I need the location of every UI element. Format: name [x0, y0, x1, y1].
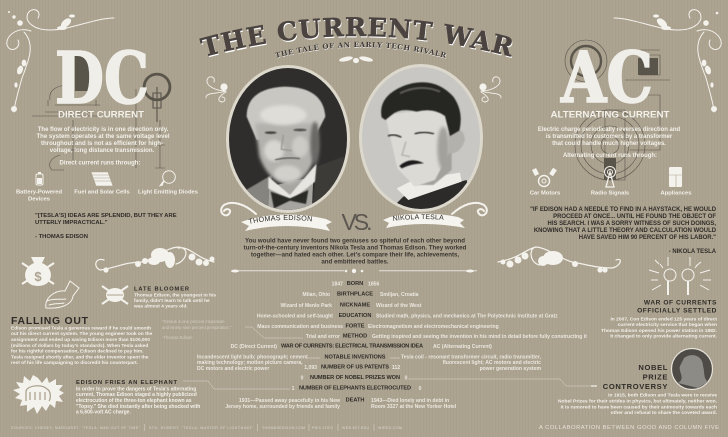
- row: birthplace: BIRTHPLACE: [337, 292, 373, 298]
- labels: direct current uses: Light Emitting Diodes: [138, 190, 198, 196]
- ornament: right oval swirl: [479, 77, 501, 102]
- row: born: BORN: [347, 281, 363, 287]
- text: nobel prize: [558, 392, 718, 416]
- icon: light emitting diode: [161, 171, 175, 185]
- footer: sources: PBS.ORG: [312, 426, 334, 430]
- row: notable inventions: fluorescent light; AC motors and electric: [443, 360, 541, 366]
- ornament: left leaf flourish: [96, 247, 214, 273]
- big letters DC: DC: [55, 36, 149, 120]
- row: patents: 112: [392, 365, 400, 371]
- heading: falling out: FALLING OUT: [11, 316, 89, 327]
- quote: Tesla: - NIKOLA TESLA: [669, 249, 717, 255]
- quote: genius: [162, 319, 232, 340]
- icon: nobel medal: [672, 348, 712, 390]
- quote: Tesla: HAVE SAVED HIM 90 PERCENT OF HIS LABOR.": [579, 235, 716, 241]
- labels: direct current uses: [16, 190, 198, 202]
- icon: tied string: [102, 286, 128, 304]
- row: notable inventions: making technology; motion picture camera,: [197, 360, 303, 366]
- label: versus: VS.: [342, 209, 372, 235]
- panel: direct current: [16, 36, 198, 202]
- text: late bloomer: Thomas Edison, the youngest in his: [134, 292, 216, 298]
- row: notable inventions: Incandescent light bulb; phonograph; cement: [197, 354, 308, 360]
- row: notable inventions: power generation system: [480, 366, 541, 372]
- text: falling out: assignment and ended up saving Edison more than $100,000: [11, 337, 150, 343]
- banner: Nikola Tesla: NIKOLA TESLA: [393, 214, 444, 221]
- description: direct current: throughout and is not as efficient for high-: [41, 141, 163, 147]
- description: direct current: Direct current runs through:: [60, 160, 140, 166]
- text: falling out: for his rightful compensation, Edison declined to pay him.: [11, 348, 143, 354]
- text: elephant: a 6,600-volt AC charge.: [76, 410, 131, 416]
- section: elephant: [13, 375, 200, 416]
- icon: appliances: [669, 167, 682, 187]
- row: method: Getting inspired and seeing the invention in his mind in detail before fully constructing it: [372, 334, 587, 340]
- row: death: 1931—Passed away peacefully in his New: [239, 398, 340, 404]
- intro text: and embittered battles.: [321, 258, 389, 266]
- row: nickname: NICKNAME: [340, 302, 370, 308]
- text: war of currents: [601, 316, 718, 340]
- ornament under subtitle: [339, 55, 373, 63]
- labels: direct current uses: Fuel and Solar Cells: [74, 190, 130, 196]
- text: war of currents: Thomas Edison opened his power station in 1882.: [601, 328, 718, 334]
- description: alternating current: Electric charge periodically reverses direction and: [538, 127, 680, 133]
- row: forte: FORTE: [346, 324, 365, 330]
- footer: sources: WEB.MIT.EDU: [342, 426, 370, 430]
- heading: war of currents: OFFICIALLY SETTLED: [637, 308, 717, 314]
- text: late bloomer: [133, 292, 216, 310]
- heading: late bloomer: LATE BLOOMER: [134, 286, 189, 292]
- heading: nobel prize controversy: PRIZE: [643, 372, 668, 382]
- quote: Edison: - THOMAS EDISON: [35, 234, 88, 240]
- text: war of currents: current electricity service that began when: [618, 322, 717, 328]
- heading: nobel prize controversy: [603, 363, 668, 391]
- row: war of currents: WAR OF CURRENTS: ELECTRICAL TRANSMISSION IDEA: [281, 344, 423, 350]
- text: elephant: "Topsy." She died instantly after being shocked with: [76, 404, 200, 410]
- intro text: [244, 238, 467, 266]
- icon: hand reaching: [46, 281, 79, 308]
- ornament: left scroll under portrait: [221, 203, 256, 215]
- text: nobel prize: other and refusal to share the coveted award.: [611, 410, 718, 416]
- row: method: Trial and error: [306, 334, 340, 340]
- big letters AC: AC: [560, 36, 653, 119]
- text: nobel prize: In 1915, both Edison and Tesla were to receive: [608, 392, 717, 398]
- description: direct current: [36, 127, 170, 166]
- row: nobel prizes: NUMBER OF NOBEL PRIZES WON: [310, 375, 400, 381]
- heading: nobel prize controversy: NOBEL: [638, 363, 668, 372]
- row: death: Room 3327 at the New Yorker Hotel: [371, 404, 457, 410]
- row: education: Studied math, physics, and mechanics at The Polytechnic Institute at Gratz: [376, 314, 558, 320]
- row: born: 1847: [332, 282, 343, 288]
- row: education: [257, 313, 558, 320]
- row: war of currents: DC (Direct Current): [231, 344, 277, 350]
- quote: Tesla: HIS SEARCH. I WAS A SORRY WITNESS OF SUCH DOINGS,: [548, 221, 716, 227]
- intro text: You would have never found two geniuses so spiteful of each other beyond: [245, 238, 465, 244]
- labels: alternating current uses: Radio Signals: [591, 190, 629, 196]
- ornament: top-left flourish: [7, 10, 114, 112]
- quote: Edison: [35, 213, 177, 240]
- description: direct current: The system operates at the same voltage level: [36, 134, 170, 140]
- text: falling out: rest of his life campaigning to discredit his counterpart.: [11, 360, 138, 366]
- row: death: Jersey home, surrounded by friends and family: [225, 404, 340, 410]
- labels: direct current uses: Battery-Powered: [16, 190, 62, 196]
- row: notable inventions: Tesla coil - resonant transformer circuit, radio transmitter,: [401, 354, 542, 360]
- footer: sources: WIRED.COM: [378, 426, 403, 430]
- row: war of currents: AC (Alternating Current): [433, 344, 492, 350]
- row: forte: Mass communication and business: [257, 324, 343, 330]
- portrait: Thomas Edison: [225, 64, 351, 214]
- connector: nobel prize: [408, 379, 595, 386]
- intro text: turn-of-the-century inventors Nikola Tesla and Thomas Edison. They worked: [244, 244, 467, 252]
- text: falling out: (millions of dollars by today's standards). When Tesla asked: [11, 343, 148, 349]
- description: alternating current: that could handle much higher voltages.: [552, 141, 666, 147]
- footer: sources: SOURCES: CHENEY, MARGARET. "TESLA: MAN OUT OF TIME": [11, 426, 141, 430]
- quote: genius: and ninety-nine percent perspiration.": [162, 325, 232, 330]
- row: patents: [304, 364, 400, 371]
- section: late bloomer: [102, 286, 216, 310]
- quote: Edison: UTTERLY IMPRACTICAL.": [35, 220, 108, 226]
- row: nickname: Wizard of Menlo Park: [281, 303, 332, 309]
- connector: elephant: [183, 381, 290, 389]
- section: falling out: [11, 316, 153, 366]
- ornament: right scroll under portrait: [452, 203, 487, 215]
- row: forte: Electromagnetism and electromechanical engineering: [368, 324, 499, 330]
- row: elephants: 0: [419, 386, 422, 392]
- technical drawing: DC dynamo and bulb: [32, 50, 171, 170]
- text: nobel prize: It is rumored to have been caused by their animosity towards each: [561, 404, 717, 410]
- banner: Thomas Edison: THOMAS EDISON: [248, 215, 312, 224]
- row: born: 1856: [368, 282, 379, 288]
- quote: genius: "Genius is one percent inspiration: [162, 319, 225, 324]
- icon: two light bulbs: [649, 257, 711, 295]
- portrait: Nikola Tesla: [358, 63, 484, 213]
- row: method: METHOD: [343, 334, 367, 340]
- quote: Tesla: KNOWING THAT A LITTLE THEORY AND CALCULATION WOULD: [534, 228, 717, 234]
- quote: Tesla: PROCEED AT ONCE... UNTIL HE FOUND THE OBJECT OF: [553, 214, 716, 220]
- row: war of currents: [231, 344, 492, 350]
- row: patents: NUMBER OF US PATENTS: [321, 364, 389, 370]
- row: elephants: 1: [292, 386, 295, 392]
- icon: battery: [36, 172, 43, 185]
- subtitle: [274, 42, 446, 58]
- labels: alternating current uses: [530, 190, 691, 196]
- icon: solar panel: [91, 172, 113, 186]
- row: notable inventions: NOTABLE INVENTIONS: [324, 354, 386, 360]
- footer: collaboration credit: A COLLABORATION BETWEEN GOOD AND COLUMN FIVE: [539, 425, 719, 431]
- section: war of currents settled: [601, 257, 718, 340]
- quote: genius: -Thomas Edison: [162, 335, 193, 340]
- heading: direct current: DIRECT CURRENT: [58, 110, 144, 120]
- ornament: top-right flourish: [614, 10, 721, 112]
- title: THE CURRENT WAR: [201, 19, 512, 58]
- text: falling out: [11, 326, 153, 366]
- footer: sources: [11, 424, 403, 431]
- row: education: Home-schooled and self-taught: [257, 314, 333, 320]
- divider: [231, 269, 477, 273]
- labels: alternating current uses: Car Motors: [530, 190, 560, 196]
- heading: war of currents: [637, 300, 717, 314]
- row: death: DEATH: [346, 398, 364, 404]
- text: elephant: [76, 386, 200, 416]
- ornament: right leaf flourish: [498, 247, 620, 273]
- row: notable inventions: [197, 354, 542, 372]
- ornament: left oval swirl: [206, 77, 228, 102]
- row: death: [225, 398, 457, 410]
- text: falling out: out his direct current system. The young engineer took on the: [11, 331, 153, 337]
- row: death: 1943—Died lonely and in debt in: [371, 398, 449, 404]
- row: birthplace: [303, 292, 419, 298]
- quote: Tesla: [530, 207, 717, 255]
- description: direct current: voltage, long distance transmission.: [50, 148, 155, 154]
- text: falling out: Edison promised Tesla a generous reward if he could smooth: [11, 326, 151, 332]
- heading: elephant: EDISON FRIES AN ELEPHANT: [76, 380, 177, 386]
- footer: sources: THOMASEDISON.COM: [262, 426, 306, 430]
- row: born: [332, 281, 379, 288]
- text: nobel prize: Nobel Prizes for their strides in physics, but ultimately, neither won.: [558, 398, 718, 404]
- connector: genius quote: [245, 327, 303, 338]
- icon: car motors: [534, 169, 555, 186]
- footer: sources: STH, ROBERT. "TESLA: MASTER OF LIGHTNING": [149, 426, 254, 430]
- text: falling out: Tesla resigned shortly after, and the elder inventor spent the: [11, 354, 149, 360]
- row: nickname: [281, 302, 422, 309]
- icon: elephant in starburst: [13, 375, 64, 414]
- text: late bloomer: was almost 4 years old.: [133, 304, 188, 310]
- row: nobel prizes: 0: [405, 376, 408, 382]
- title: THE CURRENT WAR: [199, 17, 512, 57]
- row: birthplace: Milan, Ohio: [303, 292, 330, 298]
- quote: Tesla: "IF EDISON HAD A NEEDLE TO FIND IN A HAYSTACK, HE WOULD: [530, 207, 717, 213]
- banner: Thomas Edison: [241, 214, 332, 231]
- quote: Edison: "[TESLA'S] IDEAS ARE SPLENDID, BUT THEY ARE: [35, 213, 177, 219]
- text: late bloomer: family, didn't learn to talk until he: [134, 298, 210, 304]
- row: education: EDUCATION: [339, 313, 371, 319]
- icon: money bag: $: [34, 269, 42, 284]
- text: elephant: current, Thomas Edison staged a highly publicized: [76, 392, 197, 398]
- row: birthplace: Smiljan, Croatia: [380, 292, 419, 298]
- icon: money bag: [22, 257, 54, 286]
- description: direct current: The flow of electricity is in one direction only.: [38, 127, 169, 133]
- labels: alternating current uses: Appliances: [661, 190, 691, 196]
- row: nobel prizes: 0: [301, 376, 304, 382]
- heading: nobel prize controversy: CONTROVERSY: [603, 382, 668, 391]
- intro text: together—and hated each other. Let's compare their life, achievements,: [251, 252, 459, 258]
- description: alternating current: [538, 127, 680, 159]
- row: forte: [257, 324, 499, 330]
- panel: alternating current: [530, 36, 691, 196]
- technical drawing: AC motor: [565, 40, 670, 180]
- banner: Nikola Tesla: [383, 214, 465, 228]
- heading: alternating current: ALTERNATING CURRENT: [550, 110, 670, 120]
- row: elephants: NUMBER OF ELEPHANTS ELECTROCUTED: [299, 386, 411, 392]
- description: alternating current: is transmitted to customers by a transformer: [546, 134, 673, 140]
- text: war of currents: It changed to only provide alternating current.: [610, 334, 718, 340]
- section: nobel prize controversy: [558, 348, 718, 416]
- row: notable inventions: DC motors and electric power: [197, 366, 269, 372]
- row: patents: 1,093: [304, 365, 317, 371]
- row: nickname: Wizard of the West: [376, 303, 422, 309]
- text: elephant: electrocution of the three-ton elephant known as: [76, 398, 192, 404]
- heading: war of currents: WAR OF CURRENTS: [644, 300, 717, 306]
- description: alternating current: Alternating current runs through:: [563, 153, 657, 159]
- text: war of currents: In 2007, Con Edison ended 125 years of direct: [610, 316, 717, 322]
- labels: direct current uses: Devices: [28, 196, 50, 202]
- comparison table: [197, 281, 587, 410]
- text: elephant: In order to prove the dangers of Tesla's alternating: [76, 386, 196, 392]
- icon: radio tower: [604, 166, 616, 187]
